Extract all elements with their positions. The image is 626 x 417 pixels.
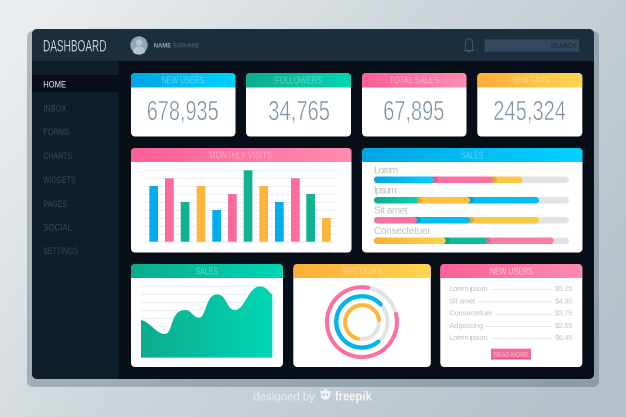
icon: bell [464,38,474,52]
progress row: ipsum [374,186,569,204]
progress row: lorem: Lorem [374,165,398,176]
area chart [141,286,272,358]
table row 5: Lorem ipsum [449,333,488,342]
table row 5: $6.45 [555,333,572,342]
user name: NAME [154,44,171,50]
user name [154,44,199,50]
table row 4 [449,321,572,330]
stat card: new favs: NEW FAVS [511,75,550,86]
table row 4: Adipiscing [449,321,483,330]
menu items: INBOX [43,103,67,114]
stat card: new favs: 245,324 [493,95,566,126]
search box [485,39,579,52]
freepik credit: designed by [253,389,315,403]
heading: sales: SALES [196,266,218,277]
dashboard window [32,29,594,379]
dashboard shadow [27,31,599,387]
active menu item: home: HOME [43,80,66,91]
sidebar [32,61,118,379]
stat card: new favs [477,73,582,136]
panel: sales progress [362,148,582,252]
stat card: followers: 34,765 [268,95,330,126]
table row 2: $4.35 [555,296,572,305]
menu items [43,103,78,257]
heading: monthly visits: MONTHLY VISITS [209,150,272,161]
freepik credit: freepik [335,389,372,403]
menu items: SOCIAL [43,222,72,234]
search box: SEARCH [551,43,577,50]
stat card: total sales: TOTAL SALES [389,75,440,86]
user name: SURNAME [173,44,199,50]
progress row: sit amet [374,206,569,224]
menu items: CHARTS [43,151,72,162]
icon: freepik mascot [320,388,331,400]
radial chart [327,287,397,357]
table row 1: $5.25 [555,284,572,293]
stat card: new users [131,73,236,136]
progress row: sit amet: Sit amet [374,206,408,217]
read more button: READ MORE [494,350,528,359]
menu items: FORMS [43,127,70,138]
progress row: consectetuer [374,226,569,244]
table row 3: Consectetuer [449,309,493,318]
icon: user avatar [130,36,148,55]
table row 5 [449,333,572,342]
progress row: ipsum: Ipsum [374,186,397,197]
table row 3: $3.75 [555,309,572,318]
table row 2: Sit amet [449,296,476,305]
table row 1 [449,284,572,293]
stat card: followers: FOLLOWERS [275,75,322,86]
freepik credit [253,388,372,403]
stat card: new users: 678,935 [147,95,219,126]
stat card: followers [246,73,351,136]
heading: sales: SALES [461,150,484,161]
stat card: total sales: 67,895 [383,95,444,126]
table row 1: Lorem ipsum [449,284,488,293]
progress row: consectetuer: Consectetuer [374,226,431,237]
panel: sales area chart [131,264,283,367]
menu items: PAGES [43,199,67,210]
heading: new users: NEW USERS [490,266,533,277]
menu items: SETTINGS [43,246,78,257]
table row 4: $2.55 [555,321,572,330]
panel: monthly visits [131,148,352,252]
top bar [32,29,594,61]
table row 3 [449,309,572,318]
heading: sections: SECTIONS [343,266,382,277]
progress row: lorem [374,165,569,183]
table row 2 [449,296,572,305]
panel: new users table [440,264,582,367]
dashboard title: DASHBOARD [43,38,107,56]
panel: sections [293,264,431,367]
stat card: total sales [362,73,466,136]
menu items: WIDGETS [43,175,76,186]
bar chart [144,170,337,242]
active menu item: home [32,75,118,92]
read more button [491,349,531,359]
stat card: new users: NEW USERS [162,75,205,86]
